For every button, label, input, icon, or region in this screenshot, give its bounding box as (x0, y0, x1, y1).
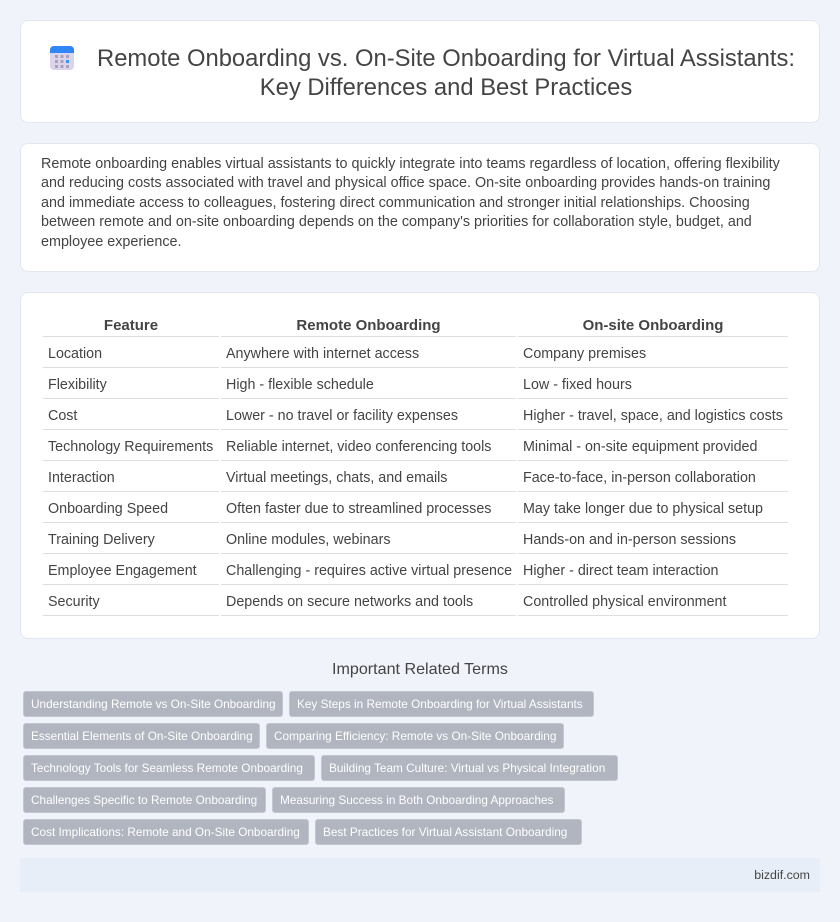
row: employee engagement (48, 563, 718, 579)
row: security (48, 594, 726, 610)
row: location: Location (48, 346, 102, 362)
tag (321, 755, 618, 781)
intro text: Remote onboarding enables virtual assistants to quickly integrate into teams regardless of location, offering flexibility (41, 156, 780, 172)
row: flexibility: Flexibility (48, 377, 107, 393)
row: cost: Higher - travel, space, and logistics costs (523, 408, 783, 424)
row: location (48, 346, 646, 362)
row: interaction (48, 470, 756, 486)
row: security: Depends on secure networks and tools (226, 594, 473, 610)
tag (23, 787, 266, 813)
tag: Technology Tools for Seamless Remote Onboarding (31, 761, 303, 775)
row: cost: Cost (48, 408, 77, 424)
table header: Remote Onboarding (296, 317, 441, 334)
footer source: bizdif.com (754, 868, 810, 882)
row: training delivery: Training Delivery (48, 532, 155, 548)
row: technology requirements (48, 439, 757, 455)
row: onboarding speed: Often faster due to streamlined processes (226, 501, 491, 517)
title (97, 44, 795, 101)
row: technology requirements: Minimal - on-site equipment provided (523, 439, 757, 455)
table header: Feature (104, 317, 158, 334)
tag: Best Practices for Virtual Assistant Onboarding (323, 825, 567, 839)
tag: Building Team Culture: Virtual vs Physical Integration (329, 761, 605, 775)
panel: comparison table (20, 292, 820, 639)
related term tags (23, 691, 618, 845)
intro text: and immediate access to colleagues, fostering direct communication and stronger initial relationships. Choosing (41, 194, 750, 210)
table header: On-site Onboarding (583, 317, 723, 334)
intro text: and reducing costs associated with travel and physical office space. On-site onboarding provides hands-on training (41, 175, 770, 191)
title: Remote Onboarding vs. On-Site Onboarding for Virtual Assistants: (97, 44, 795, 72)
row: flexibility: Low - fixed hours (523, 377, 632, 393)
intro text (41, 156, 780, 250)
tag (266, 723, 564, 749)
icon: calendar (50, 46, 74, 70)
comparison table (43, 317, 788, 616)
tag: Key Steps in Remote Onboarding for Virtual Assistants (297, 697, 583, 711)
row: flexibility (48, 377, 632, 393)
tag (272, 787, 565, 813)
tag (23, 691, 283, 717)
table header (104, 317, 723, 334)
row: location: Company premises (523, 346, 646, 362)
row: security: Controlled physical environment (523, 594, 726, 610)
row: location: Anywhere with internet access (226, 346, 419, 362)
tag: Cost Implications: Remote and On-Site Onboarding (31, 825, 300, 839)
row: cost (48, 408, 783, 424)
heading: related terms: Important Related Terms (332, 660, 508, 678)
title: Key Differences and Best Practices (260, 74, 632, 101)
tag (315, 819, 582, 845)
row: onboarding speed: Onboarding Speed (48, 501, 168, 517)
row: onboarding speed: May take longer due to physical setup (523, 501, 763, 517)
row: onboarding speed (48, 501, 763, 517)
panel: title header (20, 20, 820, 123)
row: flexibility: High - flexible schedule (226, 377, 374, 393)
tag (23, 819, 309, 845)
row: employee engagement: Employee Engagement (48, 563, 197, 579)
row: employee engagement: Higher - direct team interaction (523, 563, 718, 579)
tag: Measuring Success in Both Onboarding Approaches (280, 793, 553, 807)
row: technology requirements: Reliable internet, video conferencing tools (226, 439, 491, 455)
row: training delivery: Online modules, webinars (226, 532, 390, 548)
panel: introduction (20, 143, 820, 272)
row: security: Security (48, 594, 100, 610)
tag: Understanding Remote vs On-Site Onboarding (31, 697, 276, 711)
tag: Essential Elements of On-Site Onboarding (31, 729, 253, 743)
row: employee engagement: Challenging - requires active virtual presence (226, 563, 512, 579)
intro text: between remote and on-site onboarding depends on the company's priorities for collaboration style, budget, and (41, 214, 752, 230)
footer bar (20, 858, 820, 892)
tag (289, 691, 594, 717)
tag: Comparing Efficiency: Remote vs On-Site Onboarding (274, 729, 556, 743)
row: training delivery: Hands-on and in-person sessions (523, 532, 736, 548)
row: interaction: Virtual meetings, chats, and emails (226, 470, 447, 486)
row: cost: Lower - no travel or facility expenses (226, 408, 458, 424)
tag (23, 723, 260, 749)
row: technology requirements: Technology Requirements (48, 439, 213, 455)
row: interaction: Face-to-face, in-person collaboration (523, 470, 756, 486)
tag (23, 755, 315, 781)
row: training delivery (48, 532, 736, 548)
row: interaction: Interaction (48, 470, 115, 486)
tag: Challenges Specific to Remote Onboarding (31, 793, 257, 807)
intro text: employee experience. (41, 234, 182, 250)
